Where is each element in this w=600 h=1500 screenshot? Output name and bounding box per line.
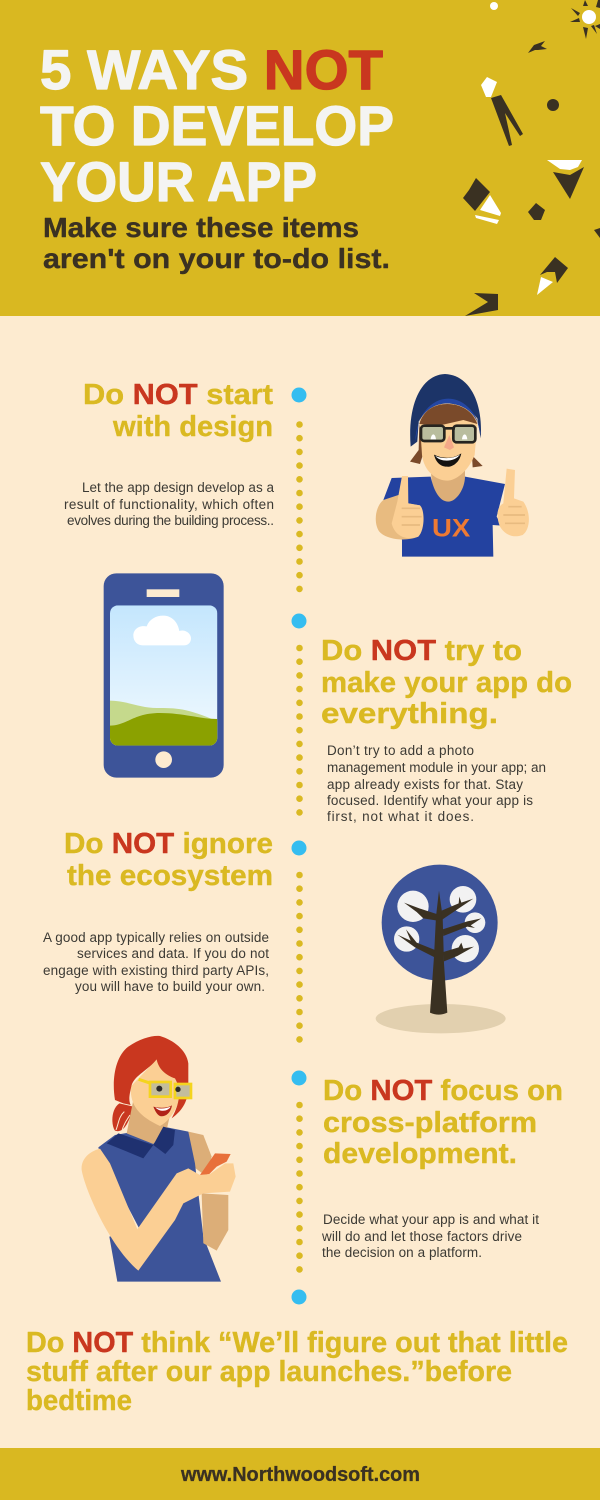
section 2 heading: Do NOT try to <box>321 635 522 667</box>
section 4 heading <box>323 1075 563 1170</box>
section 2 text <box>327 743 546 824</box>
section 4 text <box>321 1212 539 1260</box>
illustration: UX designer thumbs up: UX <box>432 516 471 543</box>
section 2 heading <box>321 635 572 730</box>
illustration: smartphone <box>104 573 224 778</box>
title: TO DEVELOP <box>40 94 394 157</box>
section 2 text: management module in your app; an <box>327 760 546 775</box>
subtitle: Make sure these items <box>43 212 359 243</box>
section 2 heading: make your app do <box>321 667 572 699</box>
footer bar <box>0 1448 600 1500</box>
section 1 text: result of functionality, which often <box>64 497 274 512</box>
section 3 text: A good app typically relies on outside <box>43 930 269 945</box>
illustration: tree <box>376 865 506 1033</box>
section 3 heading <box>64 828 273 892</box>
decorative shapes <box>463 0 600 316</box>
section 3 text <box>43 930 269 994</box>
section 4 heading: development. <box>323 1138 517 1170</box>
illustration: woman with phone <box>82 1036 236 1282</box>
section 5 heading: bedtime <box>26 1385 132 1417</box>
section 3 text: services and data. If you do not <box>77 946 269 961</box>
section 5 heading: Do NOT think “We’ll figure out that little <box>26 1327 568 1359</box>
footer URL: www.Northwoodsoft.com <box>180 1464 420 1486</box>
title: YOUR APP <box>40 150 317 213</box>
section 3 text: engage with existing third party APIs, <box>43 963 269 978</box>
section 1 text: evolves during the building process.. <box>67 513 274 528</box>
section 1 heading: with design <box>112 411 273 443</box>
section 2 text: first, not what it does. <box>327 809 474 824</box>
section 4 text: Decide what your app is and what it <box>323 1212 539 1227</box>
section 2 text: app already exists for that. Stay <box>327 777 523 792</box>
section 5 heading: stuff after our app launches.”before <box>26 1356 512 1388</box>
section 3 text: you will have to build your own. <box>75 979 265 994</box>
phone home button <box>155 751 172 768</box>
illustration: UX designer thumbs up <box>376 374 529 557</box>
section 3 heading: the ecosystem <box>67 860 273 892</box>
phone screen <box>110 605 217 746</box>
section 3 heading: Do NOT ignore <box>64 828 273 860</box>
title <box>40 38 394 213</box>
header panel <box>0 0 600 316</box>
timeline <box>292 388 306 1304</box>
phone speaker <box>147 589 179 597</box>
title: 5 WAYS NOT <box>40 38 383 101</box>
subtitle <box>43 212 390 274</box>
section 1 heading: Do NOT start <box>83 379 274 411</box>
subtitle: aren't on your to-do list. <box>43 243 390 274</box>
section 1 text: Let the app design develop as a <box>82 480 274 495</box>
section 2 heading: everything. <box>321 698 498 730</box>
section 4 heading: Do NOT focus on <box>323 1075 563 1107</box>
section 4 text: the decision on a platform. <box>322 1245 482 1260</box>
section 1 text <box>64 480 274 528</box>
section 5 heading <box>26 1327 568 1417</box>
section 4 text: will do and let those factors drive <box>321 1229 522 1244</box>
section 1 heading <box>83 379 274 443</box>
section 2 text: focused. Identify what your app is <box>327 793 533 808</box>
section 2 text: Don’t try to add a photo <box>327 743 474 758</box>
section 4 heading: cross-platform <box>323 1107 537 1139</box>
